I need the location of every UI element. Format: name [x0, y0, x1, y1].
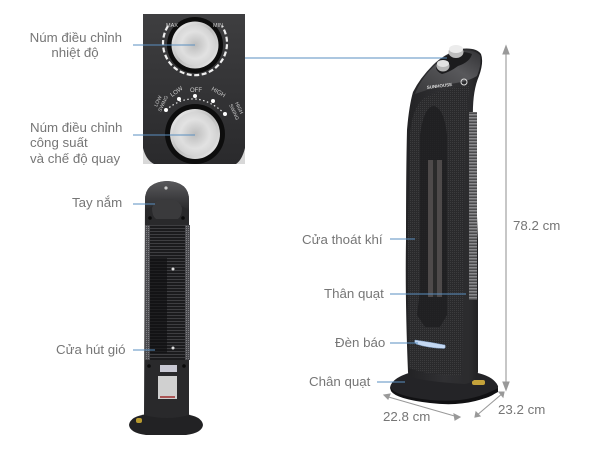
callout lines	[133, 45, 466, 382]
tower body	[406, 49, 482, 384]
base	[390, 372, 498, 403]
indicator light	[415, 340, 445, 348]
top cap	[145, 181, 189, 210]
heater slots	[428, 160, 433, 297]
label: indicator light: Đèn báo	[335, 335, 385, 350]
label: power second line: công suất	[30, 135, 88, 150]
icon: temperature knob: MAX	[166, 23, 178, 29]
dimension: width: 22.8 cm	[383, 409, 430, 424]
icon: power and swing knob: HIGH	[233, 101, 244, 116]
label: handle: Tay nắm	[72, 195, 122, 210]
dimension: depth: 23.2 cm	[498, 402, 545, 417]
back view of heater	[129, 181, 203, 435]
brand: SUNHOUSE	[427, 82, 452, 90]
label: base: Chân quạt	[309, 374, 371, 389]
icon: power and swing knob: LOW	[170, 86, 185, 99]
dimension: height: 78.2 cm	[513, 218, 560, 233]
icon: power and swing knob	[153, 86, 244, 164]
dimension arrows	[384, 46, 509, 420]
handle recess	[152, 199, 182, 219]
label: temperature knob second line: nhiệt độ	[51, 45, 99, 60]
base	[129, 414, 203, 435]
label: temperature knob: Núm điều chỉnh	[30, 30, 122, 45]
intake grille	[150, 225, 185, 360]
label: air intake: Cửa hút gió	[56, 342, 126, 357]
label: power and swing knob: Núm điều chỉnh	[30, 120, 122, 135]
icon: power and swing knob: LOW	[153, 95, 164, 108]
label: air outlet: Cửa thoát khí	[302, 232, 383, 247]
mesh front	[408, 85, 470, 375]
front view of heater	[390, 45, 498, 404]
icon: temperature knob: MIN	[213, 23, 223, 29]
side vent	[469, 112, 477, 300]
label: body: Thân quạt	[324, 286, 384, 301]
icon: power and swing knob: HIGH	[210, 87, 226, 99]
icon: power and swing knob: OFF	[190, 88, 202, 94]
control head	[415, 50, 481, 94]
icon: power and swing knob: SWING	[227, 103, 240, 121]
panel: control knobs close-up	[143, 14, 245, 164]
icon: temperature knob	[163, 17, 227, 75]
rating labels	[160, 365, 177, 372]
dark oval outlet	[417, 106, 447, 327]
label: power third line: và chế độ quay	[30, 151, 121, 166]
side mesh	[145, 225, 150, 360]
tower body	[144, 181, 189, 418]
icon: power and swing knob: SWING	[157, 95, 170, 113]
